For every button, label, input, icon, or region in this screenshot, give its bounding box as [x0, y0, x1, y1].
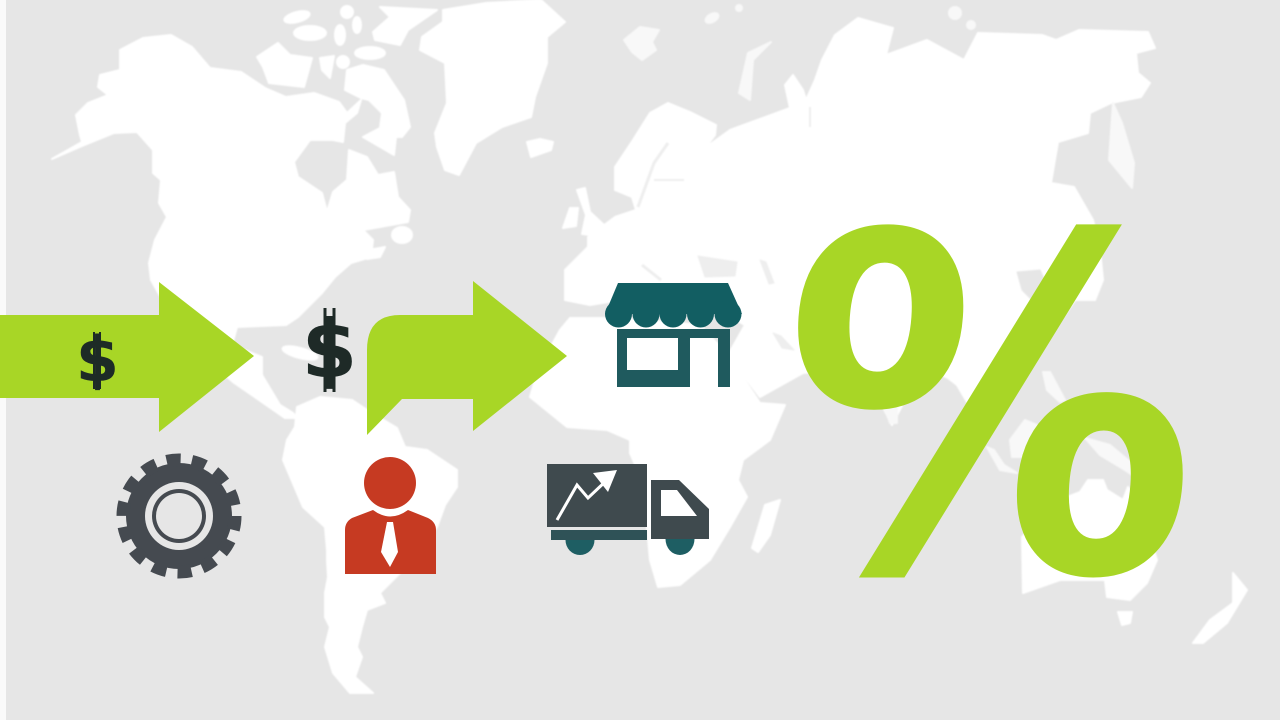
inland seas — [638, 107, 1047, 350]
North America — [52, 35, 410, 418]
icon: businessman — [345, 457, 436, 574]
arrow: left green arrow — [0, 282, 254, 432]
Madagascar — [752, 500, 780, 552]
icon: dollar sign: $ — [302, 303, 357, 396]
Canadian arctic islands — [257, 6, 437, 362]
Africa — [530, 318, 785, 587]
Greenland — [420, 0, 565, 175]
New Zealand — [1193, 573, 1247, 643]
icon: dollar sign on arrow: $ — [76, 323, 119, 396]
Great Britain and Ireland — [563, 188, 604, 236]
Eurasia — [565, 18, 1155, 425]
large percent sign: % — [759, 138, 1220, 682]
South America — [283, 397, 457, 693]
icon: storefront — [605, 283, 742, 387]
arrow: curved green arrow — [367, 281, 567, 435]
icon: gear — [123, 460, 235, 572]
Australia — [1022, 480, 1157, 600]
Tasmania — [1118, 612, 1132, 625]
icon: delivery truck with rising chart — [547, 464, 709, 555]
Arctic and Pacific islands — [624, 5, 1140, 480]
Iceland — [527, 139, 553, 157]
